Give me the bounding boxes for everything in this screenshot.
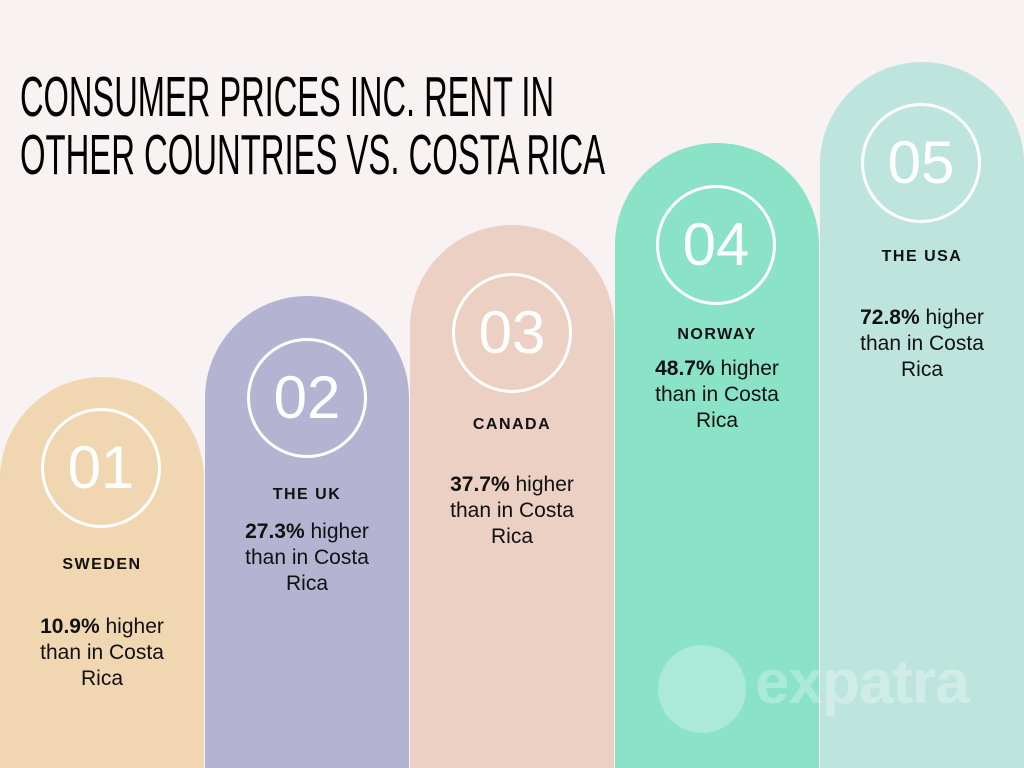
text: usa: Rica — [901, 358, 943, 381]
panel: usa — [820, 62, 1024, 768]
panel: canada — [410, 225, 614, 768]
text: usa: 72.8% higher — [860, 306, 984, 329]
text: sweden: than in Costa — [40, 641, 164, 664]
label: canada: CANADA — [473, 416, 551, 433]
text: sweden: Rica — [81, 667, 123, 690]
panel: sweden — [0, 377, 204, 768]
label: sweden: SWEDEN — [62, 556, 142, 573]
text: canada: than in Costa — [450, 499, 574, 522]
panel: norway — [615, 143, 819, 768]
text: canada: Rica — [491, 525, 533, 548]
text: norway — [655, 357, 779, 432]
text: canada — [450, 473, 574, 548]
text: norway: Rica — [696, 409, 738, 432]
text: uk — [245, 520, 369, 595]
text: sweden: 10.9% higher — [40, 615, 164, 638]
number circle 01: 01 — [68, 434, 134, 501]
text: uk: 27.3% higher — [245, 520, 369, 543]
text: uk: Rica — [286, 572, 328, 595]
number circle 05: 05 — [888, 129, 954, 196]
text: usa — [860, 306, 984, 381]
number circle 04 — [656, 185, 776, 305]
number circle 03: 03 — [479, 299, 545, 366]
number circle 01 — [41, 408, 161, 528]
text: norway: than in Costa — [655, 383, 779, 406]
number circle 05 — [861, 103, 981, 223]
number circle 03 — [452, 273, 572, 393]
logo watermark: expatra — [755, 648, 969, 717]
label: usa: THE USA — [882, 248, 962, 265]
label: norway: NORWAY — [677, 326, 757, 343]
title — [20, 65, 605, 187]
text: sweden — [40, 615, 164, 690]
number circle 02 — [247, 338, 367, 458]
number circle 04: 04 — [683, 211, 749, 278]
text: uk: than in Costa — [245, 546, 369, 569]
panel: uk — [205, 296, 409, 768]
number circle 02: 02 — [274, 364, 340, 431]
logo watermark — [658, 645, 970, 733]
label: uk: THE UK — [273, 486, 341, 503]
text: norway: 48.7% higher — [655, 357, 779, 380]
text: usa: than in Costa — [860, 332, 984, 355]
text: canada: 37.7% higher — [450, 473, 574, 496]
